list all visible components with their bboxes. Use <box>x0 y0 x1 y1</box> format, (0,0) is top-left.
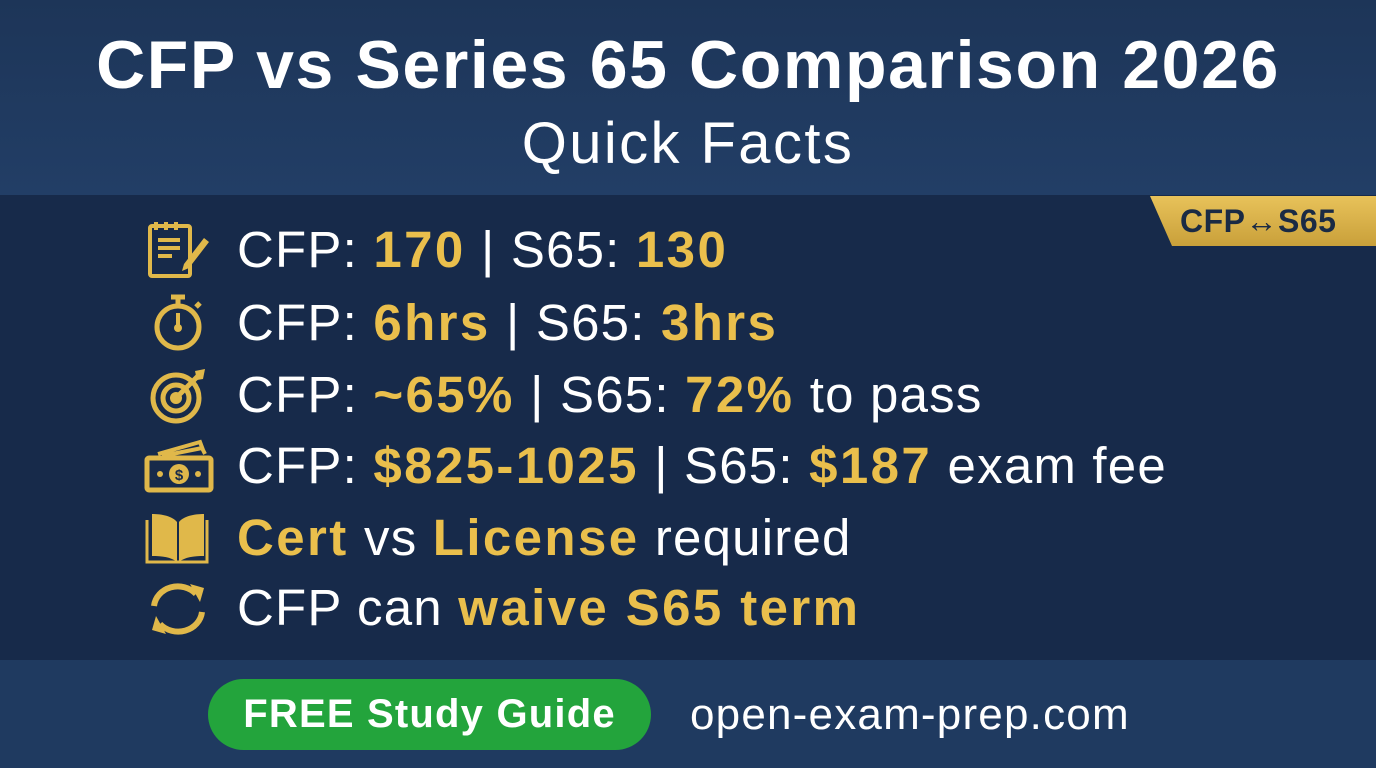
row: passing score: CFP: ~65% | S65: 72% to pass <box>237 366 983 423</box>
subtitle: Quick Facts <box>522 111 854 176</box>
title: CFP vs Series 65 Comparison 2026 <box>96 27 1280 103</box>
icon: book <box>146 514 208 564</box>
icon: money <box>144 440 214 492</box>
row: cert vs license: Cert vs License required <box>237 509 852 566</box>
button: free study guide: FREE Study Guide <box>243 692 616 736</box>
panel: facts <box>0 195 1376 660</box>
badge: CFP↔S65 <box>1180 203 1336 239</box>
icon: money: $ <box>175 467 184 484</box>
badge <box>1150 196 1376 246</box>
icon: stopwatch <box>154 294 202 350</box>
row: waive: CFP can waive S65 term <box>237 579 860 636</box>
icon: refresh <box>151 583 205 635</box>
row: fee: CFP: $825-1025 | S65: $187 exam fee <box>237 437 1167 494</box>
header <box>0 0 1376 195</box>
row: time: CFP: 6hrs | S65: 3hrs <box>237 294 778 351</box>
icon: target <box>150 369 205 424</box>
row: questions: CFP: 170 | S65: 130 <box>237 221 728 278</box>
footer <box>0 660 1376 768</box>
button: free study guide <box>208 679 651 750</box>
url: open-exam-prep.com <box>690 690 1130 739</box>
icon: notepad <box>148 222 209 278</box>
